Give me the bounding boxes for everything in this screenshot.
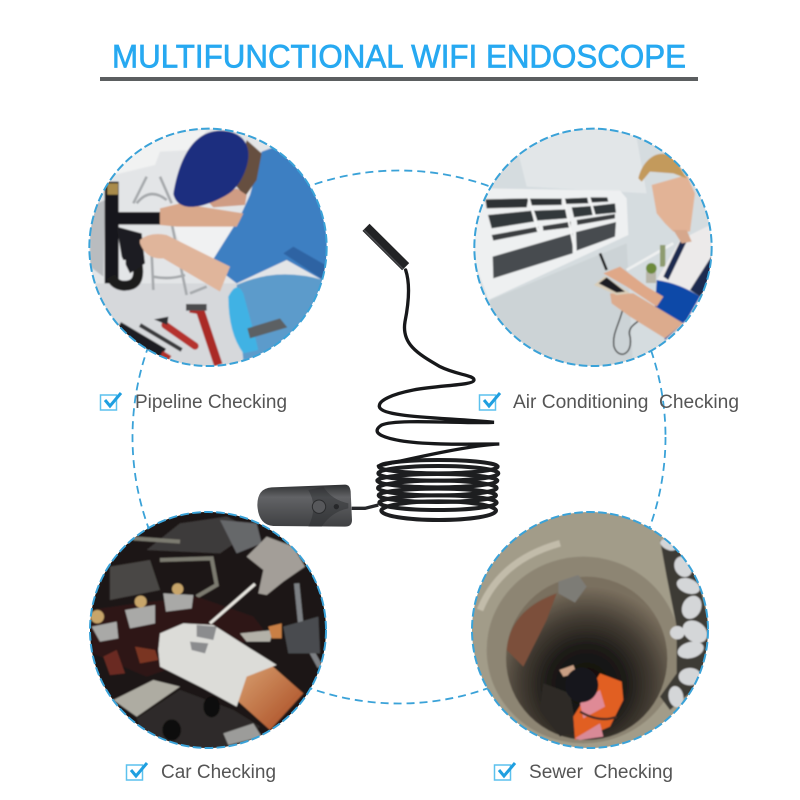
wifi box [257, 485, 352, 527]
endoscope product: cable, probe and wifi box [257, 227, 499, 527]
leaves [660, 540, 708, 710]
label: air conditioning checking: Air Conditioning Checking [513, 392, 739, 413]
plant [646, 272, 656, 283]
injectors [92, 593, 193, 642]
cap [173, 131, 249, 207]
AC unit [473, 188, 628, 300]
loose cable and loops [377, 270, 499, 466]
jeans [237, 274, 325, 361]
usb lead [352, 505, 378, 508]
photo: car checking [89, 511, 327, 749]
head [652, 175, 695, 232]
forearm [237, 664, 303, 730]
shirt [211, 145, 328, 283]
photo: air conditioning checking [473, 128, 713, 367]
coil of cable [377, 460, 498, 520]
upper hand and tool [247, 537, 305, 595]
label: pipeline checking: Pipeline Checking [135, 392, 287, 413]
title: MULTIFUNCTIONAL WIFI ENDOSCOPE [112, 38, 686, 74]
cable [614, 307, 642, 354]
dashed connecting ring [132, 170, 666, 704]
phone [594, 276, 630, 295]
face and hair [237, 140, 262, 197]
title underline [100, 77, 698, 81]
person in the well [559, 665, 577, 677]
glove [158, 623, 277, 707]
arms [160, 203, 243, 227]
label: sewer checking: Sewer Checking [529, 762, 673, 783]
overalls and shirt [657, 226, 712, 324]
lower rail [113, 680, 180, 717]
photo: sewer checking [471, 511, 709, 749]
arm and hands [603, 267, 663, 307]
photo: pipeline checking [88, 128, 328, 367]
floor tools [190, 308, 218, 365]
probe tip [366, 227, 406, 267]
label: car checking: Car Checking [161, 762, 276, 783]
